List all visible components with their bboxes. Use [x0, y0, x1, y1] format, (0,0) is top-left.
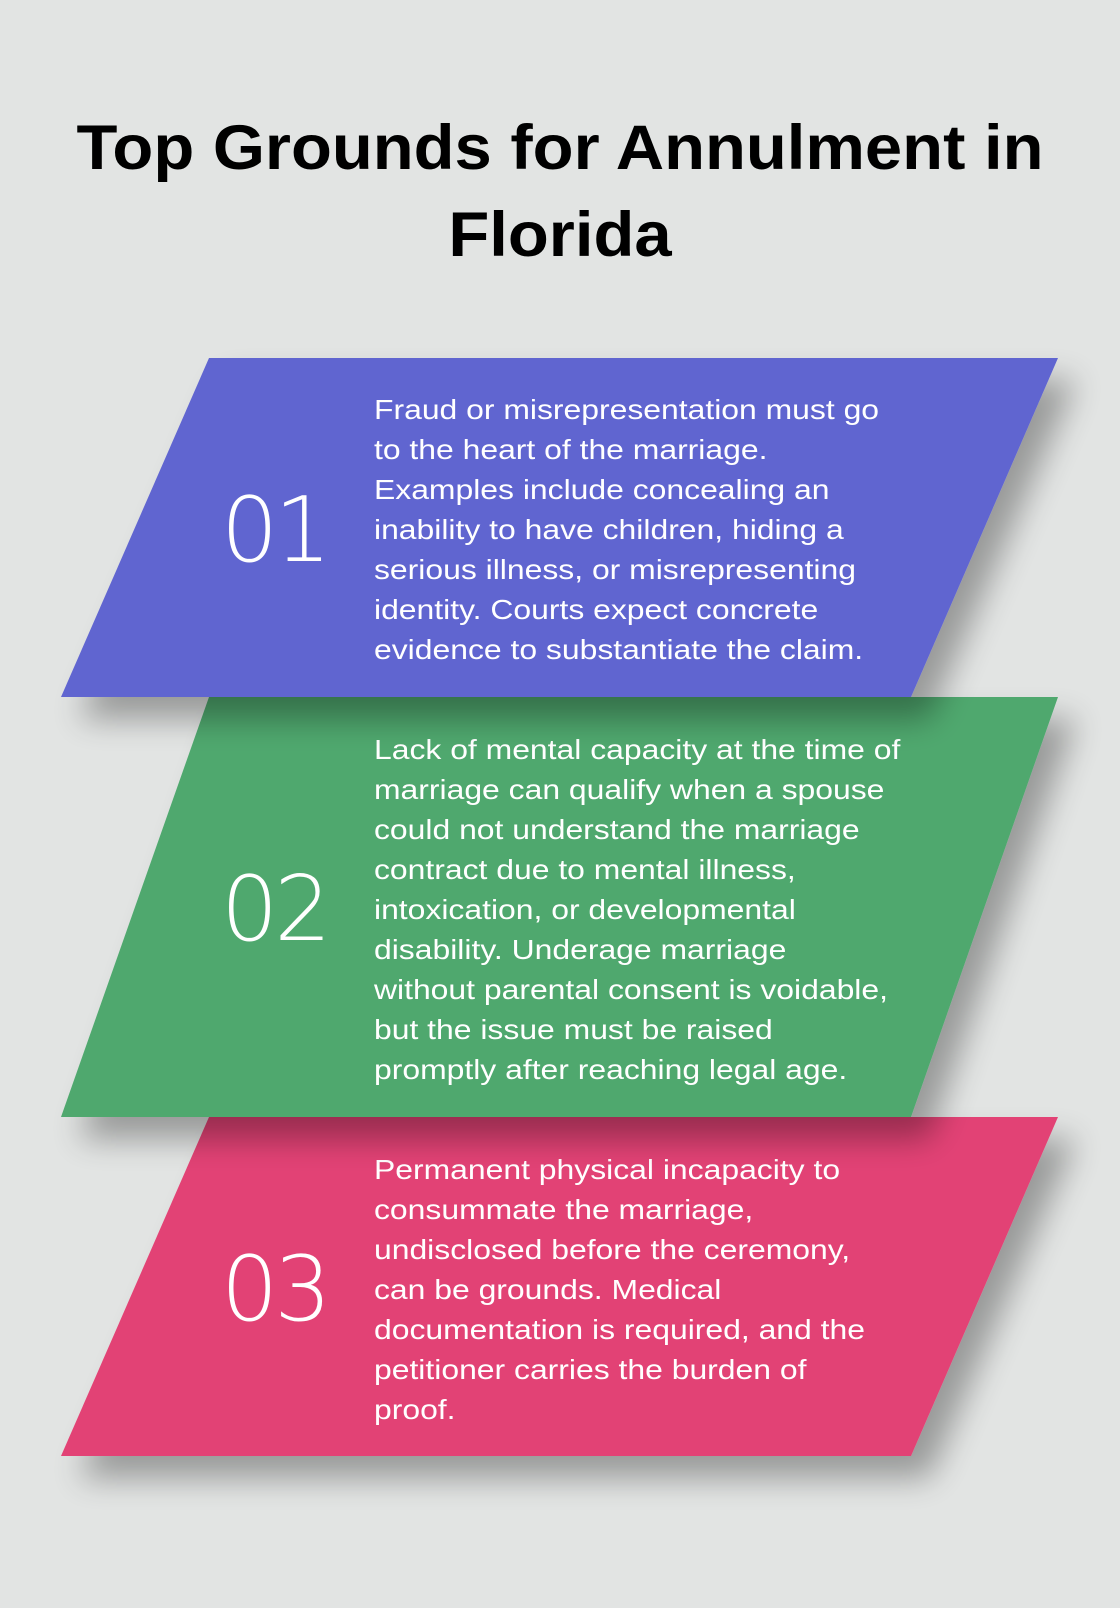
text block 02: Lack of mental capacity at the time of: [374, 735, 901, 765]
text block 01: Examples include concealing an: [374, 475, 830, 505]
text block 03: documentation is required, and the: [374, 1315, 865, 1345]
text block 01: identity. Courts expect concrete: [374, 595, 818, 625]
title: [77, 112, 1043, 270]
text block 02: disability. Underage marriage: [374, 935, 786, 965]
text block 02: without parental consent is voidable,: [373, 975, 888, 1005]
number 03: 03: [221, 1237, 328, 1342]
text block 03: can be grounds. Medical: [374, 1275, 721, 1305]
text block 01: inability to have children, hiding a: [374, 515, 844, 545]
text block 02: could not understand the marriage: [374, 815, 860, 845]
text block 03: Permanent physical incapacity to: [374, 1155, 840, 1185]
text block 01: [374, 395, 879, 665]
text block 01: evidence to substantiate the claim.: [374, 635, 863, 665]
text block 02: contract due to mental illness,: [374, 855, 796, 885]
text block 02: but the issue must be raised: [374, 1015, 773, 1045]
text block 03: petitioner carries the burden of: [374, 1355, 807, 1385]
text block 02: [373, 735, 901, 1085]
number 02: 02: [221, 857, 328, 962]
number 01: 01: [221, 478, 328, 583]
panel: 03 physical incapacity: [61, 1117, 1058, 1456]
text block 02: intoxication, or developmental: [374, 895, 796, 925]
title: Top Grounds for Annulment in: [77, 112, 1043, 183]
text block 01: Fraud or misrepresentation must go: [374, 395, 879, 425]
text block 03: proof.: [374, 1395, 456, 1425]
text block 03: consummate the marriage,: [374, 1195, 753, 1225]
text block 02: promptly after reaching legal age.: [374, 1055, 847, 1085]
text block 03: undisclosed before the ceremony,: [374, 1235, 850, 1265]
text block 03: [374, 1155, 865, 1425]
title: Florida: [448, 199, 672, 270]
panel: 02 mental capacity: [61, 697, 1058, 1117]
text block 02: marriage can qualify when a spouse: [374, 775, 884, 805]
text block 01: serious illness, or misrepresenting: [374, 555, 856, 585]
panel: 01 fraud: [61, 358, 1058, 697]
text block 01: to the heart of the marriage.: [374, 435, 767, 465]
